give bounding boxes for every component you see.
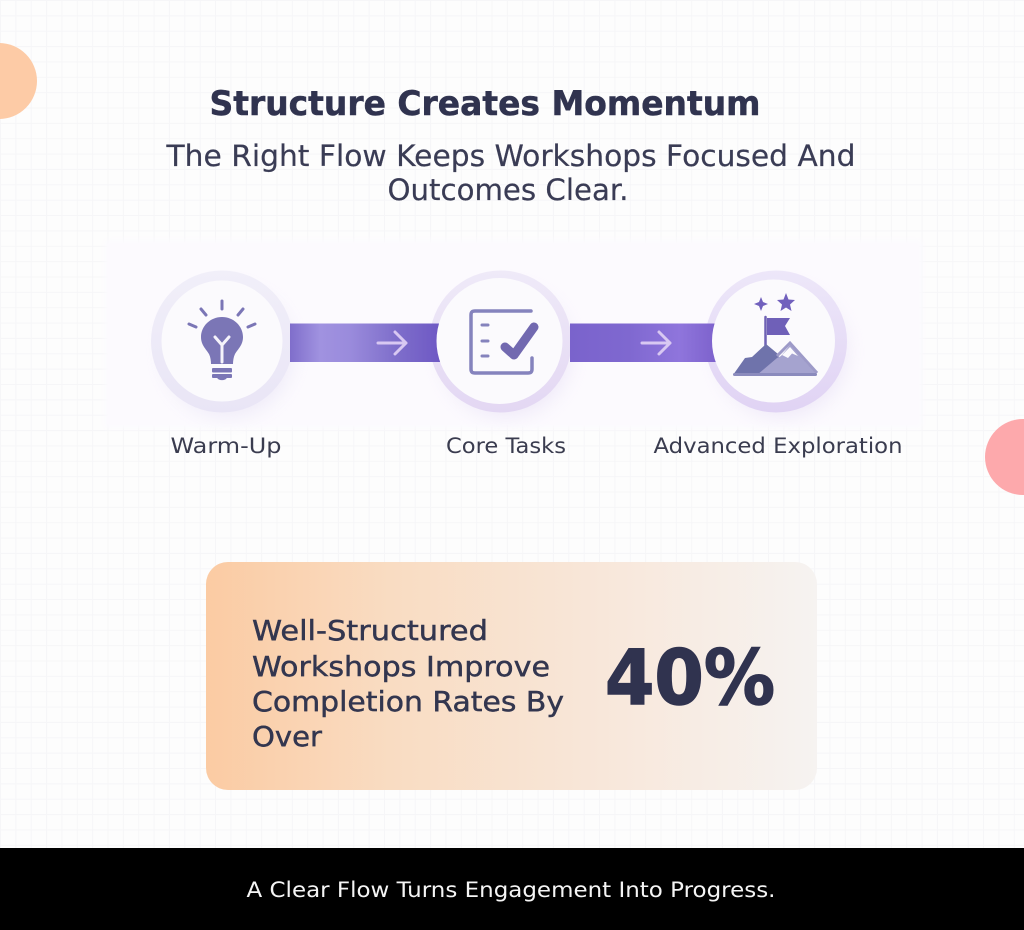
decorative circle: peach [0,43,37,119]
footer text: A Clear Flow Turns Engagement Into Progress. [246,878,776,902]
icon disc: core tasks with checklist [436,278,562,404]
footer bar [0,848,1024,930]
icon disc: warm-up with light bulb [162,280,282,402]
connector bar 2 with arrow [570,324,716,362]
icon disc: exploration with mountain, flag and stars [712,280,835,402]
subtitle [165,139,856,207]
callout text: Well-Structured [252,614,488,647]
label: warm-up: Warm-Up [170,434,282,458]
step 3: advanced exploration ring [705,270,847,416]
step 2: core tasks ring [430,270,572,416]
callout card [206,562,817,790]
callout text: Completion Rates By [252,685,564,718]
statistic: 40%: 40% [605,633,775,722]
panel: process flow [105,240,922,428]
callout text [252,614,564,753]
callout text: Workshops Improve [252,650,550,683]
callout text: Over [252,720,322,753]
subtitle: The Right Flow Keeps Workshops Focused And [165,139,856,173]
connector bar 1 with arrow [290,324,440,362]
step 1: warm-up ring [151,270,293,416]
label: advanced exploration: Advanced Exploration [654,434,902,458]
label: core tasks: Core Tasks [446,434,566,458]
title: Structure Creates Momentum [210,84,760,124]
subtitle: Outcomes Clear. [388,173,628,207]
decorative circle: coral [985,419,1024,495]
